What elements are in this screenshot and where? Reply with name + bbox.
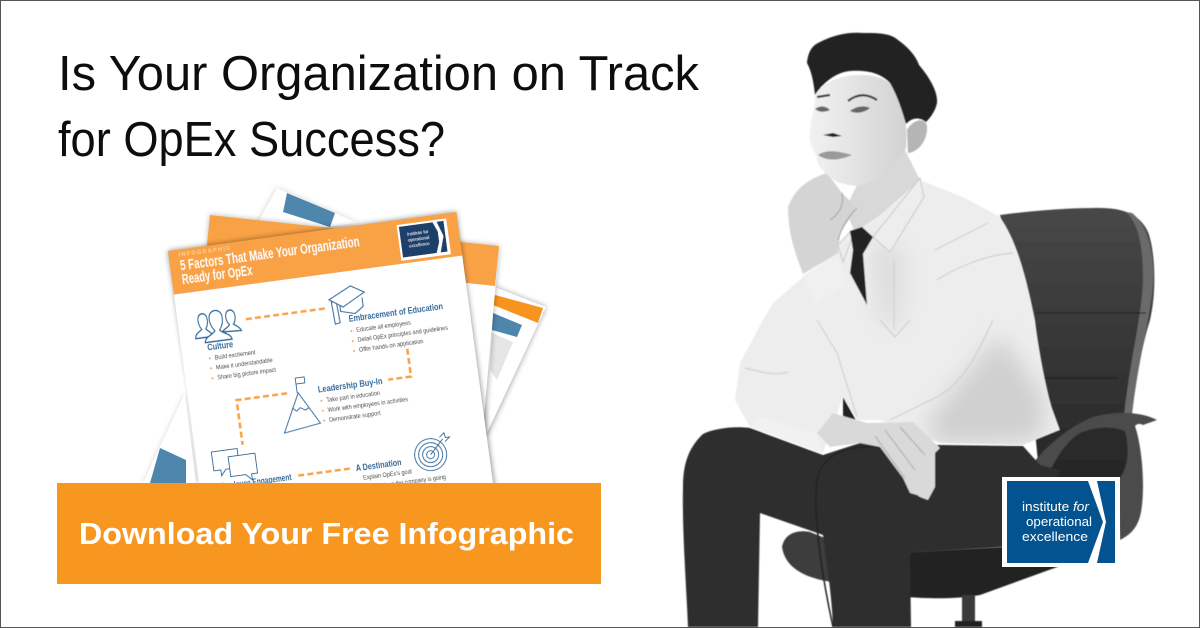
- collar: [838, 178, 924, 262]
- back sheet: top: [257, 187, 356, 228]
- chair armrest: [1022, 413, 1157, 540]
- heading: for OpEx Success?: [58, 113, 445, 167]
- shirt folds: [745, 223, 1013, 420]
- heading: [58, 47, 699, 167]
- tie: [850, 227, 873, 305]
- icon: speech bubbles: [210, 448, 258, 481]
- fist: [788, 173, 857, 274]
- sheet header band: [168, 212, 462, 295]
- main sheet shadow: [168, 212, 495, 490]
- back sheet: orange header: [195, 215, 499, 440]
- education block: Educate all employees: [356, 320, 411, 334]
- call-to-action button: Download Your Free Infographic: [79, 516, 574, 551]
- engagement heading: Employee Engagement: [219, 472, 292, 492]
- lips: [818, 151, 852, 160]
- chair stem: [962, 595, 975, 625]
- destination block: Share where the company is going: [364, 474, 447, 492]
- logo: [1002, 477, 1120, 567]
- education block: Offer hands-on application: [359, 338, 424, 354]
- chair: [782, 208, 1157, 627]
- chair back: [1000, 208, 1154, 482]
- chair seat: [782, 531, 832, 582]
- sheet logo: operational: [408, 235, 430, 243]
- sheet logo: institute for: [407, 229, 429, 237]
- nose: [823, 133, 842, 137]
- education block: Detail OpEx principles and guidelines: [357, 325, 448, 344]
- ear: [907, 120, 927, 153]
- leaflet stack: [143, 187, 548, 483]
- dashed connectors: [235, 307, 413, 477]
- neck: [845, 150, 920, 232]
- culture block: Make it understandable: [216, 357, 273, 372]
- hair: [807, 33, 937, 124]
- eyes: [815, 106, 870, 113]
- education block: Embracement of Education: [348, 301, 444, 324]
- logo: institute for: [1022, 499, 1090, 514]
- cuff at chin: [803, 253, 847, 303]
- culture block: Culture: [207, 339, 234, 353]
- logo: excellence: [1022, 529, 1088, 544]
- icon: people: [192, 307, 242, 344]
- destination block: Explain OpEx's goal: [363, 468, 412, 482]
- cuff: [750, 417, 823, 454]
- face: [809, 75, 906, 186]
- main sheet: [168, 212, 493, 483]
- shirt shading: [870, 240, 1045, 445]
- culture block: Share big picture impact: [217, 367, 277, 381]
- sheet logo: [397, 218, 451, 261]
- sheet title: [180, 237, 360, 284]
- education block: [348, 304, 448, 352]
- culture block: [207, 342, 276, 380]
- sheet eyebrow: INFOGRAPHIC: [178, 246, 231, 259]
- back sheet: right: [486, 285, 548, 436]
- icon: target: [414, 432, 451, 472]
- man: [683, 33, 1060, 627]
- leadership block: [318, 378, 408, 422]
- icon: graduation cap: [328, 284, 368, 325]
- leadership block: Take part in education: [326, 390, 381, 404]
- back sheet: bottom left: [143, 393, 200, 483]
- call-to-action button: [57, 483, 601, 584]
- leadership block: Work with employees in activities: [327, 396, 409, 414]
- sheet title: 5 Factors That Make Your Organization: [179, 233, 361, 274]
- icon: mountain with flag: [284, 376, 322, 434]
- leadership block: Demonstrate support: [329, 410, 381, 424]
- hand on knee: [817, 413, 940, 500]
- destination block: [356, 460, 446, 483]
- trousers: [683, 427, 1060, 627]
- sheet logo: excellence: [409, 241, 431, 249]
- destination block: A Destination: [355, 457, 402, 473]
- shirt: [735, 180, 1060, 453]
- culture block: Build excitement: [214, 349, 256, 362]
- sheet title: Ready for OpEx: [181, 262, 254, 288]
- leadership block: Leadership Buy-In: [317, 376, 383, 395]
- logo: operational: [1026, 514, 1092, 529]
- eyebrows: [817, 95, 877, 101]
- gap between arms: [843, 397, 857, 422]
- heading: Is Your Organization on Track: [58, 47, 699, 101]
